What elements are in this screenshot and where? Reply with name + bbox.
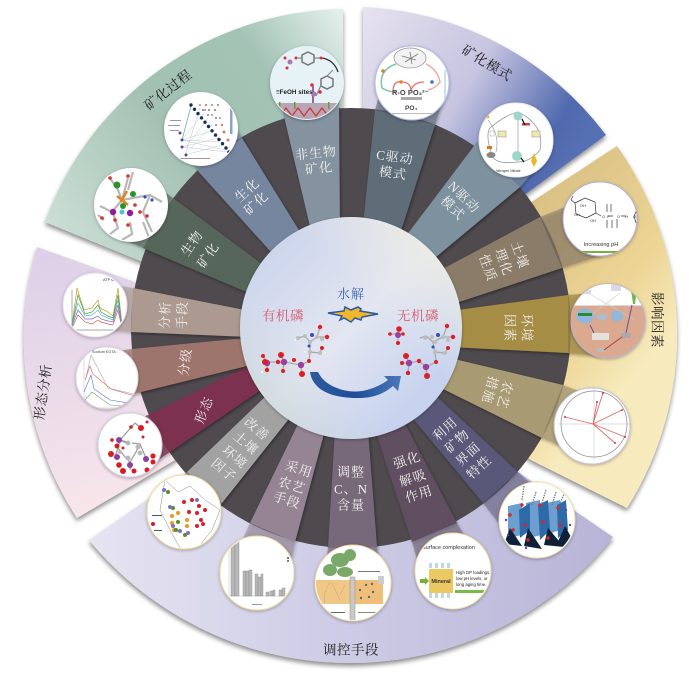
dark ring bbox=[131, 108, 571, 548]
label: PO4: PO₄ bbox=[405, 105, 418, 112]
panel: 影响因素 sector bbox=[351, 146, 677, 508]
molecule: free phosphate bbox=[388, 326, 405, 345]
band: 强化解吸作用: 强化 bbox=[391, 449, 423, 471]
band: 调整C、N含量: C、N bbox=[334, 482, 368, 496]
image: plant and soil compartments bbox=[315, 545, 391, 622]
band: 强化解吸作用: 作用 bbox=[403, 483, 435, 505]
image: phosphate structure, increasing pH: O bbox=[602, 214, 605, 219]
image: soil interaction diagram bbox=[570, 283, 646, 358]
label: 水解: 水解 bbox=[337, 286, 365, 302]
image: phosphate structure, increasing pH: OH bbox=[590, 218, 596, 223]
band: 调整C、N含量: 调整 bbox=[337, 464, 365, 480]
band: 利用矿物界面特性: 特性 bbox=[464, 452, 494, 482]
panel: 调控手段 sector bbox=[89, 328, 613, 663]
band: 形态 bbox=[125, 362, 268, 465]
band: 改善土壤环境因子: 土壤 bbox=[230, 428, 262, 458]
image: phosphate structure, increasing pH: H bbox=[636, 204, 639, 209]
molecule: remaining adenosine diphosphate bbox=[400, 324, 455, 379]
image: surface complexation diagram: low pH levels, or bbox=[456, 576, 488, 581]
label: chart title: Sodium EDTA bbox=[92, 350, 116, 354]
band: 采用农艺手段: 采用 bbox=[283, 458, 315, 480]
label: Mineral: Mineral bbox=[431, 579, 451, 585]
label: 无机磷: 无机磷 bbox=[397, 308, 439, 324]
band: 采用农艺手段 bbox=[240, 420, 325, 557]
band: 改善土壤环境因子 bbox=[165, 392, 292, 525]
band: 改善土壤环境因子: 因子 bbox=[208, 455, 240, 485]
panel: 形态分析 sector bbox=[24, 247, 351, 518]
band: 利用矿物界面特性 bbox=[410, 392, 540, 525]
band: 环境因素: 因素 bbox=[502, 314, 518, 342]
image: phosphate structure, increasing pH bbox=[563, 182, 639, 256]
band: C驱动模式: C驱动 bbox=[375, 147, 415, 167]
image: FeOH sites reaction scheme bbox=[270, 46, 344, 123]
image: map with sample dots bbox=[147, 475, 221, 560]
band: C驱动模式: 模式 bbox=[378, 164, 408, 182]
image: phosphate structure, increasing pH: OH bbox=[574, 212, 580, 217]
band: 土壤理化性质 bbox=[437, 205, 602, 305]
band: 调整C、N含量: 含量 bbox=[337, 498, 365, 512]
label: ATP: ATP sites bbox=[103, 278, 119, 282]
band: 土壤理化性质: 性质 bbox=[476, 252, 500, 284]
band: 利用矿物界面特性: 利用 bbox=[430, 414, 460, 444]
label: High DP loadings note: High DP loadings, bbox=[456, 570, 490, 575]
band: 利用矿物界面特性: 矿物 bbox=[442, 426, 472, 456]
band: 生物矿化 bbox=[120, 182, 270, 296]
band: 改善土壤环境因子: 改善 bbox=[241, 414, 273, 444]
image: XP spectra chart bbox=[63, 273, 127, 337]
panel: 矿化模式 sector bbox=[351, 7, 606, 328]
image: phosphate structure, increasing pH: O bbox=[617, 214, 620, 219]
label: Surface complexation: Surface complexation bbox=[422, 545, 475, 551]
band: 分级: 分级 bbox=[176, 347, 194, 377]
band: 土壤理化性质: 理化 bbox=[492, 246, 516, 278]
image: PCA vector plot bbox=[554, 388, 630, 464]
icon: hydrolysis star burst bbox=[328, 307, 378, 322]
band: 环境因素 bbox=[450, 292, 600, 356]
band: 非生物矿化: 非生物 bbox=[294, 143, 338, 163]
image: C-driven mineralization cycle bbox=[375, 46, 449, 120]
heading: 调控手段: 调控手段 bbox=[323, 642, 379, 658]
label: R-O-PO3: R-O PO₃²⁻ bbox=[392, 88, 429, 97]
band: N驱动模式: 模式 bbox=[438, 193, 468, 223]
band: 生化矿化 bbox=[182, 122, 305, 262]
label: Increasing pH: Increasing pH bbox=[584, 242, 618, 248]
image: correlation heatmap bbox=[164, 92, 238, 166]
label: legend line: Nitrogen Nitrate bbox=[496, 169, 521, 173]
band: 分析手段: 手段 bbox=[174, 301, 190, 329]
image: line chart bbox=[76, 347, 138, 409]
band: 改善土壤环境因子: 环境 bbox=[219, 442, 251, 472]
band: 采用农艺手段: 手段 bbox=[271, 489, 303, 511]
band: N驱动模式: N驱动 bbox=[445, 178, 483, 216]
band: 生化矿化: 矿化 bbox=[241, 188, 271, 218]
image: surface complexation diagram bbox=[415, 533, 491, 609]
image: phosphate structure, increasing pH: P bbox=[607, 214, 610, 219]
band: 非生物矿化: 矿化 bbox=[304, 159, 334, 177]
band: 土壤理化性质: 土壤 bbox=[508, 239, 532, 271]
band: 利用矿物界面特性: 界面 bbox=[453, 439, 483, 469]
heading: 影响因素: 影响因素 bbox=[650, 292, 664, 348]
band: 环境因素: 环境 bbox=[520, 314, 534, 342]
image: bar chart bbox=[220, 536, 294, 610]
image: phosphate structure, increasing pH: OH bbox=[580, 203, 586, 208]
band: 分析手段: 分析 bbox=[157, 301, 173, 329]
molecule: organic phosphate bbox=[261, 324, 329, 377]
label: 有机磷: 有机磷 bbox=[262, 308, 304, 324]
band: 农艺措施 bbox=[435, 358, 590, 445]
band: 非生物矿化 bbox=[272, 80, 340, 235]
image: phytate molecule bbox=[98, 413, 162, 477]
band: 强化解吸作用: 解吸 bbox=[397, 467, 429, 489]
heading: 矿化过程: 矿化过程 bbox=[141, 67, 195, 113]
band: N驱动模式 bbox=[403, 125, 535, 262]
band: C驱动模式 bbox=[362, 85, 443, 240]
image: layered mineral sheets bbox=[499, 482, 576, 558]
image: phosphate structure, increasing pH: H bbox=[625, 214, 628, 219]
image: N-driven cycle bbox=[479, 103, 553, 177]
label: FeOH sites: ≡FeOH sites bbox=[276, 89, 313, 96]
band: 分析手段 bbox=[105, 284, 250, 337]
image: surface complexation diagram: long aging time. bbox=[456, 582, 486, 587]
band: 生物矿化: 矿化 bbox=[194, 239, 222, 271]
heading: 形态分析: 形态分析 bbox=[31, 363, 54, 421]
image: phosphate structure, increasing pH: O bbox=[633, 214, 636, 219]
heading: 矿化模式: 矿化模式 bbox=[459, 41, 515, 84]
panel: 矿化过程 sector bbox=[45, 9, 351, 328]
image: amino acid binding site molecule bbox=[94, 168, 168, 242]
center circle: hydrolysis bbox=[240, 217, 462, 439]
band: 农艺措施: 农艺 bbox=[494, 380, 516, 410]
band: 分级 bbox=[110, 338, 255, 398]
band: 农艺措施: 措施 bbox=[479, 375, 501, 405]
arrow: hydrolysis direction bbox=[310, 372, 401, 398]
band: 调整C、N含量 bbox=[325, 430, 380, 570]
band: 生物矿化: 生物 bbox=[178, 227, 206, 259]
band: 形态: 形态 bbox=[192, 394, 216, 426]
band: 生化矿化: 生化 bbox=[232, 175, 262, 205]
band: 采用农艺手段: 农艺 bbox=[276, 474, 308, 496]
band: 强化解吸作用 bbox=[375, 418, 470, 570]
